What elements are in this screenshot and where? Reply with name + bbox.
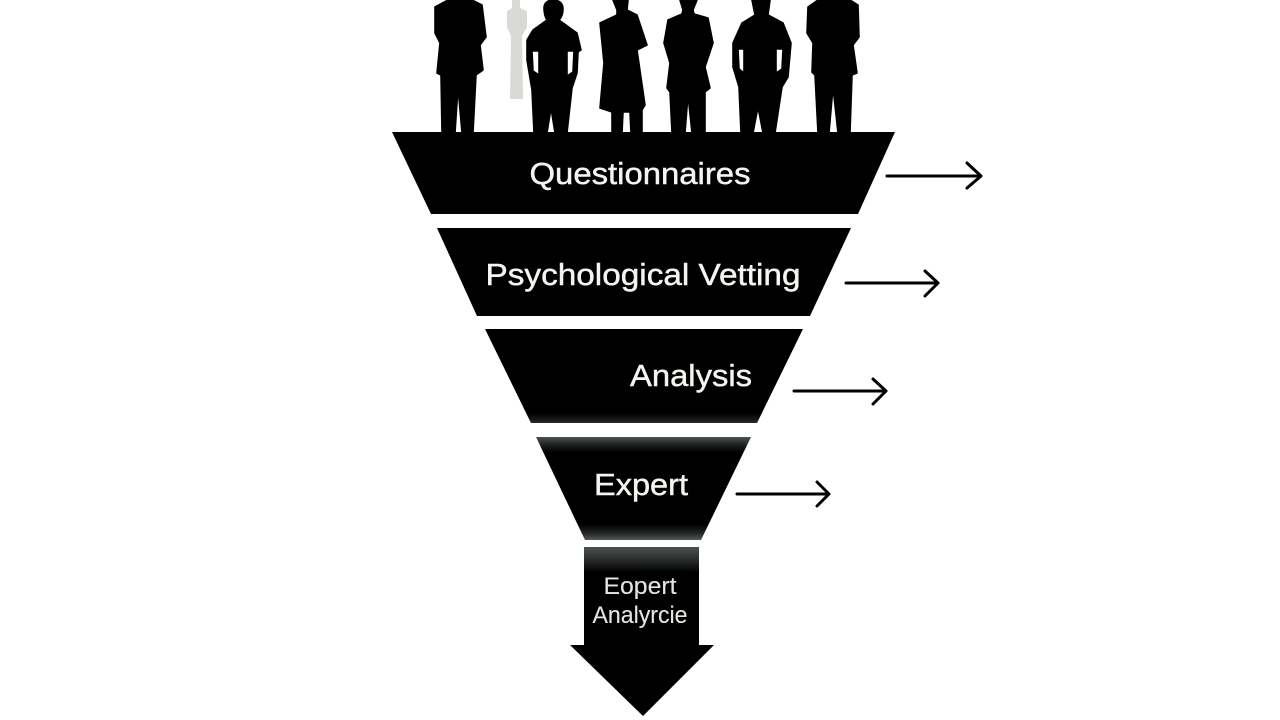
arrow: from Psychological Vetting <box>846 271 938 296</box>
funnel tier: Questionnaires <box>392 132 895 214</box>
arrow: from Analysis <box>794 379 886 404</box>
arrow: from Expert <box>737 482 829 506</box>
final down arrow with label: Eopert <box>604 573 677 600</box>
funnel tier: Analysis: Analysis <box>630 358 752 393</box>
funnel tier: Expert: Expert <box>594 467 688 502</box>
people silhouettes <box>435 0 859 133</box>
final down arrow with label <box>570 547 714 716</box>
final down arrow with label: Analyrcie <box>592 602 688 629</box>
funnel tier: Psychological Vetting <box>437 228 851 316</box>
arrow: from Questionnaires <box>887 163 981 188</box>
funnel tier: Analysis <box>485 329 803 423</box>
person 5 <box>733 0 791 133</box>
funnel tier: Psychological Vetting: Psychological Vetting <box>486 257 800 292</box>
person 2 <box>527 0 581 133</box>
person 6 <box>807 0 859 133</box>
funnel tier: Expert <box>536 437 751 540</box>
person 3 <box>600 0 647 133</box>
person 4 <box>664 0 713 133</box>
faint background figure <box>507 0 527 99</box>
funnel tier: Questionnaires: Questionnaires <box>530 156 750 191</box>
person 1 <box>435 0 486 133</box>
